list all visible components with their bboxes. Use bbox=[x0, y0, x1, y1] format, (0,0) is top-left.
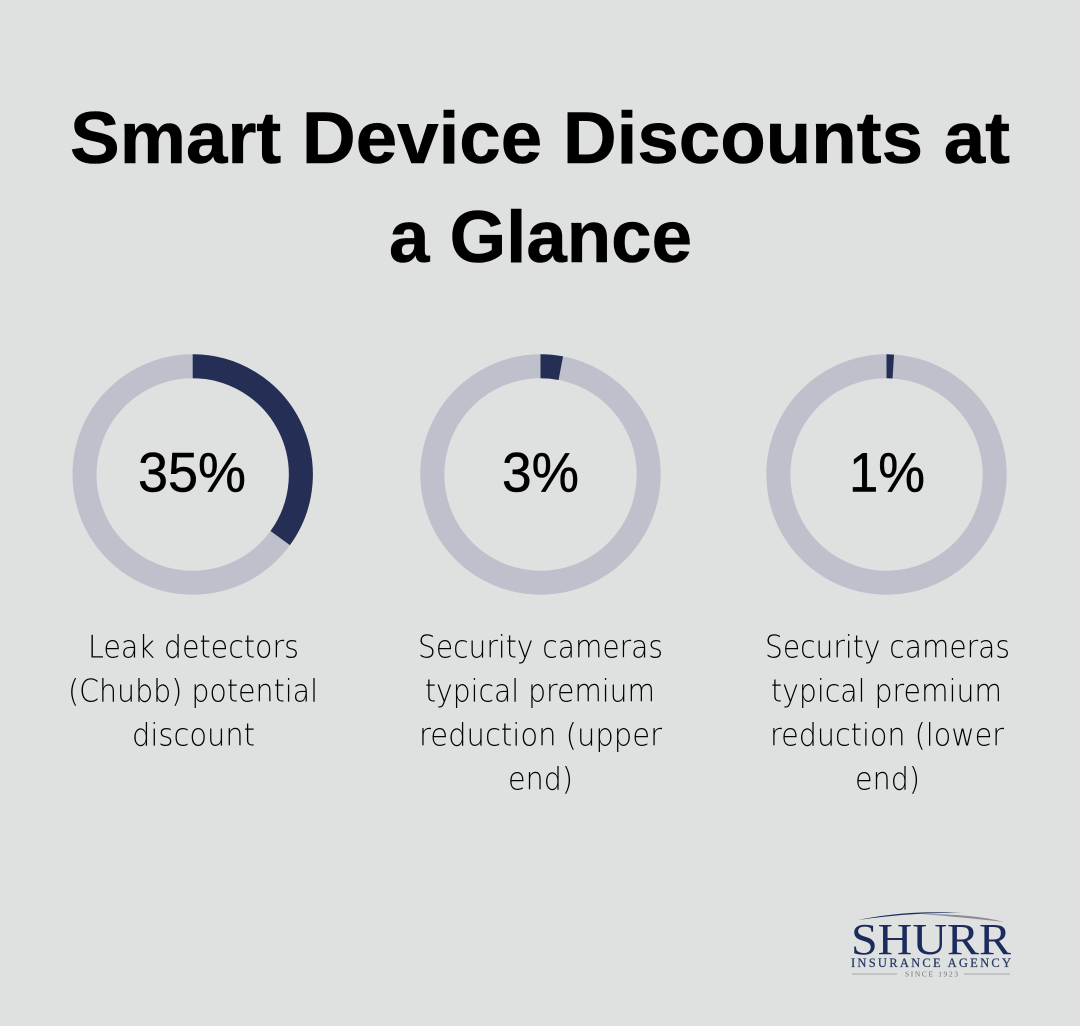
title bbox=[70, 98, 1010, 278]
value: 1%: 1% bbox=[849, 440, 925, 504]
title: Smart Device Discounts at bbox=[70, 98, 1010, 179]
label: leak detectors: discount bbox=[132, 718, 255, 754]
label: security cameras upper end: end) bbox=[508, 762, 573, 798]
label: security cameras lower end: typical premium bbox=[771, 674, 1002, 710]
donut chart: 3% bbox=[432, 366, 649, 583]
value: 35%: 35% bbox=[138, 440, 246, 504]
label: security cameras upper end: typical premium bbox=[425, 674, 655, 710]
label: leak detectors: Leak detectors bbox=[88, 630, 299, 666]
donut chart: 1% bbox=[778, 366, 995, 583]
label: security cameras upper end: reduction (upper bbox=[419, 718, 662, 754]
label: security cameras upper end bbox=[418, 630, 663, 798]
label: security cameras lower end: reduction (lower bbox=[770, 718, 1004, 754]
panel: security cameras upper end 3% bbox=[418, 366, 663, 798]
logo: Shurr Insurance Agency bbox=[851, 912, 1012, 978]
value: 3%: 3% bbox=[502, 440, 579, 504]
logo wordmark: SHURR bbox=[851, 915, 1012, 964]
label: security cameras upper end: Security cameras bbox=[418, 630, 663, 666]
label: leak detectors: (Chubb) potential bbox=[68, 674, 318, 710]
logo swoosh bbox=[858, 912, 1004, 922]
donut chart: 35% bbox=[84, 366, 301, 583]
panel: leak detectors 35% bbox=[68, 366, 318, 754]
panel: security cameras lower end 1% bbox=[765, 366, 1010, 798]
label: security cameras lower end bbox=[765, 630, 1010, 798]
label: leak detectors bbox=[68, 630, 318, 754]
logo tagline: SINCE 1923 bbox=[905, 970, 958, 978]
label: security cameras lower end: end) bbox=[855, 762, 920, 798]
label: security cameras lower end: Security cameras bbox=[765, 630, 1010, 666]
title: a Glance bbox=[389, 197, 692, 278]
logo subtitle: INSURANCE AGENCY bbox=[851, 956, 1011, 970]
